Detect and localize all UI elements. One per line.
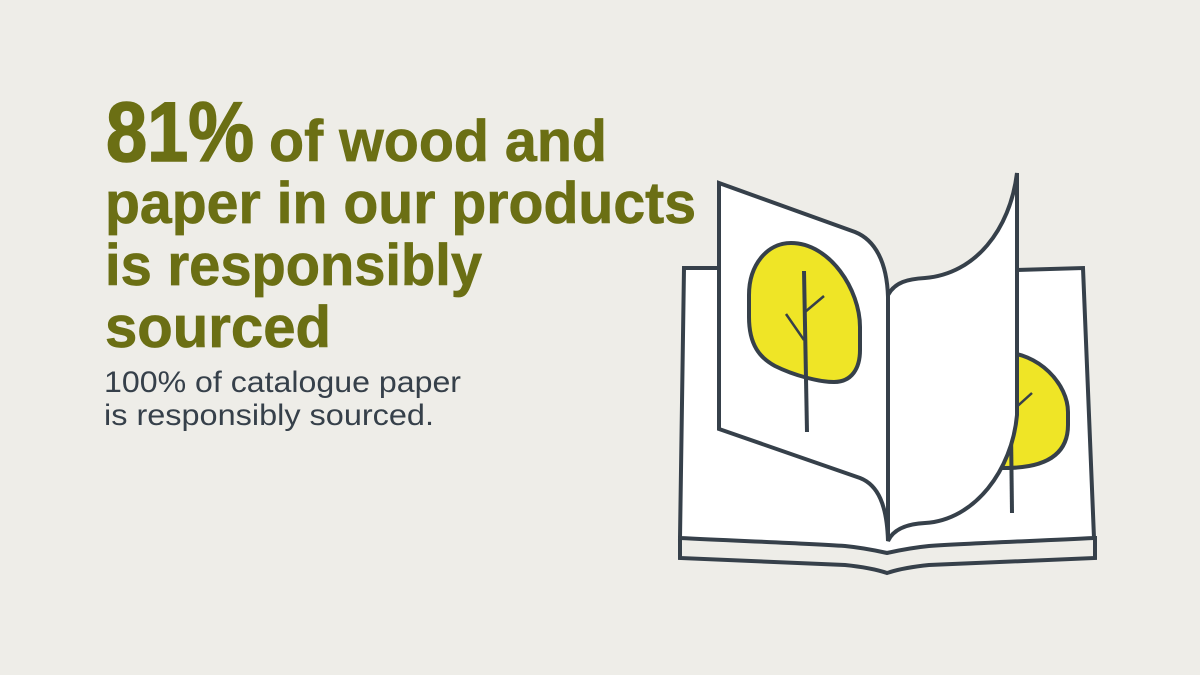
heading line 2: paper in our products bbox=[105, 171, 696, 236]
right tree trunk bbox=[1011, 430, 1012, 513]
left tree branches bbox=[786, 296, 824, 340]
subtext line 1: 100% of catalogue paper bbox=[104, 366, 461, 399]
right tree bbox=[985, 352, 1068, 513]
left turning page bbox=[719, 183, 888, 541]
left tree trunk bbox=[804, 271, 807, 432]
right tree crown bbox=[985, 352, 1068, 468]
book base strip bbox=[680, 538, 1095, 573]
right tree branch bbox=[1012, 393, 1032, 411]
right turning page bbox=[888, 173, 1017, 541]
subtext: catalogue paper bbox=[104, 366, 461, 432]
heading line 3: is responsibly bbox=[105, 233, 482, 298]
statistic: 81%: 81% bbox=[106, 85, 254, 179]
left tree crown bbox=[749, 243, 860, 382]
heading line 1: of wood and bbox=[269, 109, 607, 174]
back page spread bbox=[680, 268, 1094, 553]
illustration: open book with trees bbox=[680, 173, 1095, 573]
subtext line 2: is responsibly sourced. bbox=[104, 399, 434, 432]
heading line 4: sourced bbox=[105, 295, 331, 360]
left tree bbox=[749, 243, 860, 432]
heading: 81% of wood and paper in our products is responsibly sourced bbox=[105, 85, 696, 360]
